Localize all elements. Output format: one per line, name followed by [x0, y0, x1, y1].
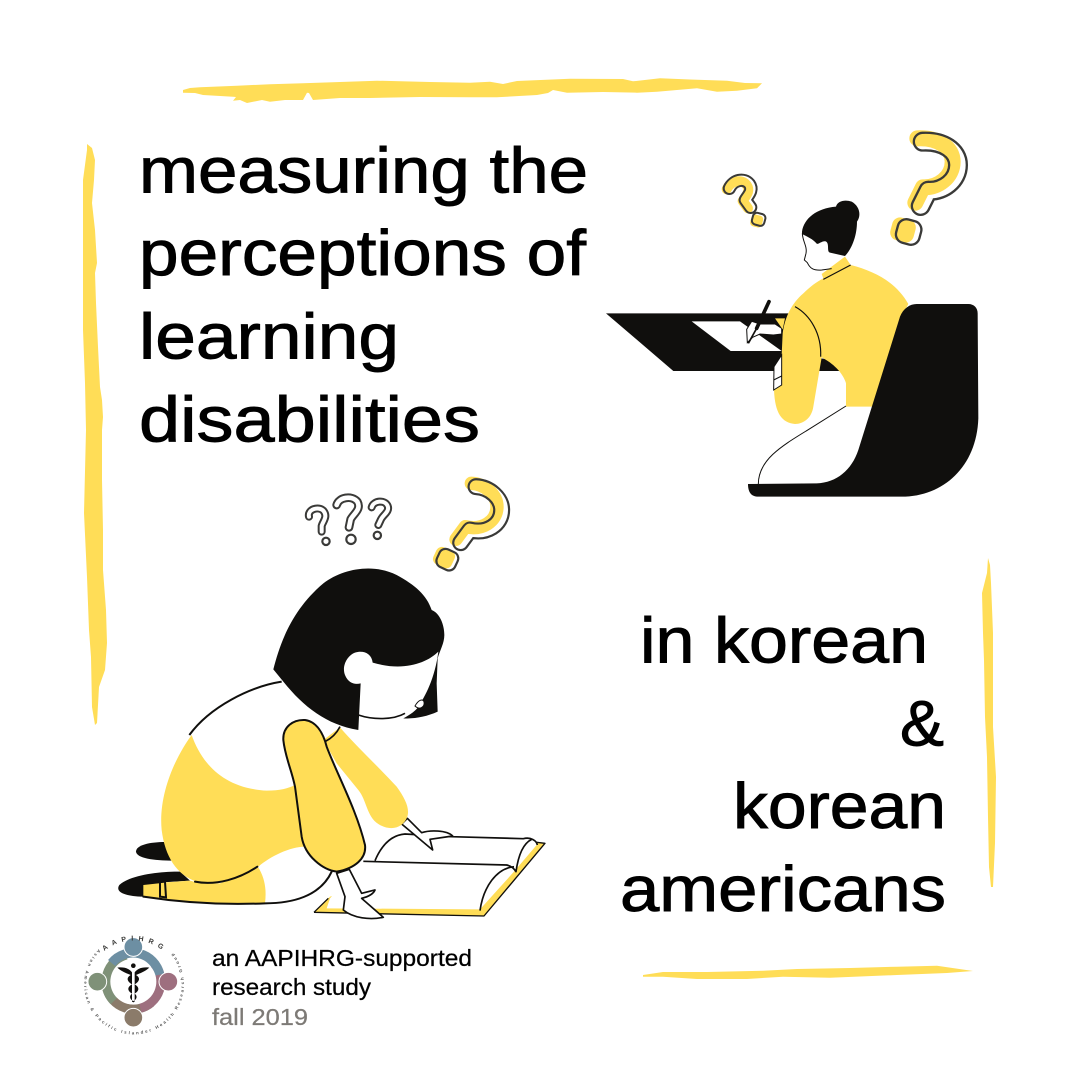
- brush stroke: left: [83, 144, 107, 725]
- torso white top outline: [189, 682, 282, 735]
- subtitle: korean: [733, 770, 946, 842]
- icon: large question mark: [431, 483, 502, 573]
- title: learning: [139, 300, 399, 372]
- brush stroke: bottom: [643, 966, 973, 979]
- ear nose detail: [415, 700, 424, 708]
- hair: [273, 569, 444, 730]
- credit text: research study: [212, 974, 371, 1000]
- icon: large question mark: [888, 138, 958, 247]
- paper: [692, 321, 782, 351]
- front hand: [337, 869, 383, 918]
- neck line: [325, 727, 340, 742]
- arm white forearm: [774, 355, 782, 390]
- face line: [358, 713, 405, 719]
- desk: [606, 313, 841, 371]
- leg outline: [758, 406, 846, 484]
- dress skirt: [161, 735, 305, 882]
- back hand: [402, 818, 453, 850]
- brush stroke: right: [982, 558, 996, 887]
- logo people: [88, 938, 178, 1027]
- logo: AAPIHRG: [84, 936, 184, 1034]
- icon: three small question marks: [309, 498, 388, 545]
- book pages: [327, 834, 537, 911]
- subtitle: in korean: [640, 604, 928, 676]
- title: measuring the: [139, 134, 588, 206]
- credit text: fall 2019: [212, 1004, 308, 1030]
- back arm sleeve: [323, 727, 408, 828]
- subtitle: [620, 604, 946, 925]
- feet: [118, 842, 190, 897]
- title: [139, 134, 588, 456]
- pen and hand: [747, 302, 785, 343]
- illustration: woman writing at desk: [606, 138, 978, 497]
- leg: [143, 867, 266, 904]
- front arm sleeve: [283, 720, 365, 872]
- title: perceptions of: [139, 217, 586, 289]
- chair: [748, 304, 978, 497]
- title: disabilities: [139, 384, 480, 456]
- subtitle: &: [900, 688, 944, 760]
- logo ring text: AAPIHRG: [103, 936, 164, 951]
- logo ring text: Asian American & Pacific Islander Health Research Group: [84, 949, 184, 1034]
- torso and arm: [774, 257, 908, 424]
- icon: small question mark: [727, 180, 766, 228]
- credit text: [212, 945, 472, 1030]
- illustration: girl reading on floor: [118, 483, 545, 918]
- sleeve seam and collar lines: [795, 265, 851, 357]
- brush stroke: top: [183, 78, 762, 103]
- book cover: [314, 842, 545, 916]
- subtitle: americans: [620, 853, 946, 925]
- credit text: an AAPIHRG-supported: [212, 945, 472, 971]
- hair and bun: [802, 201, 859, 270]
- logo caduceus: [117, 963, 149, 1002]
